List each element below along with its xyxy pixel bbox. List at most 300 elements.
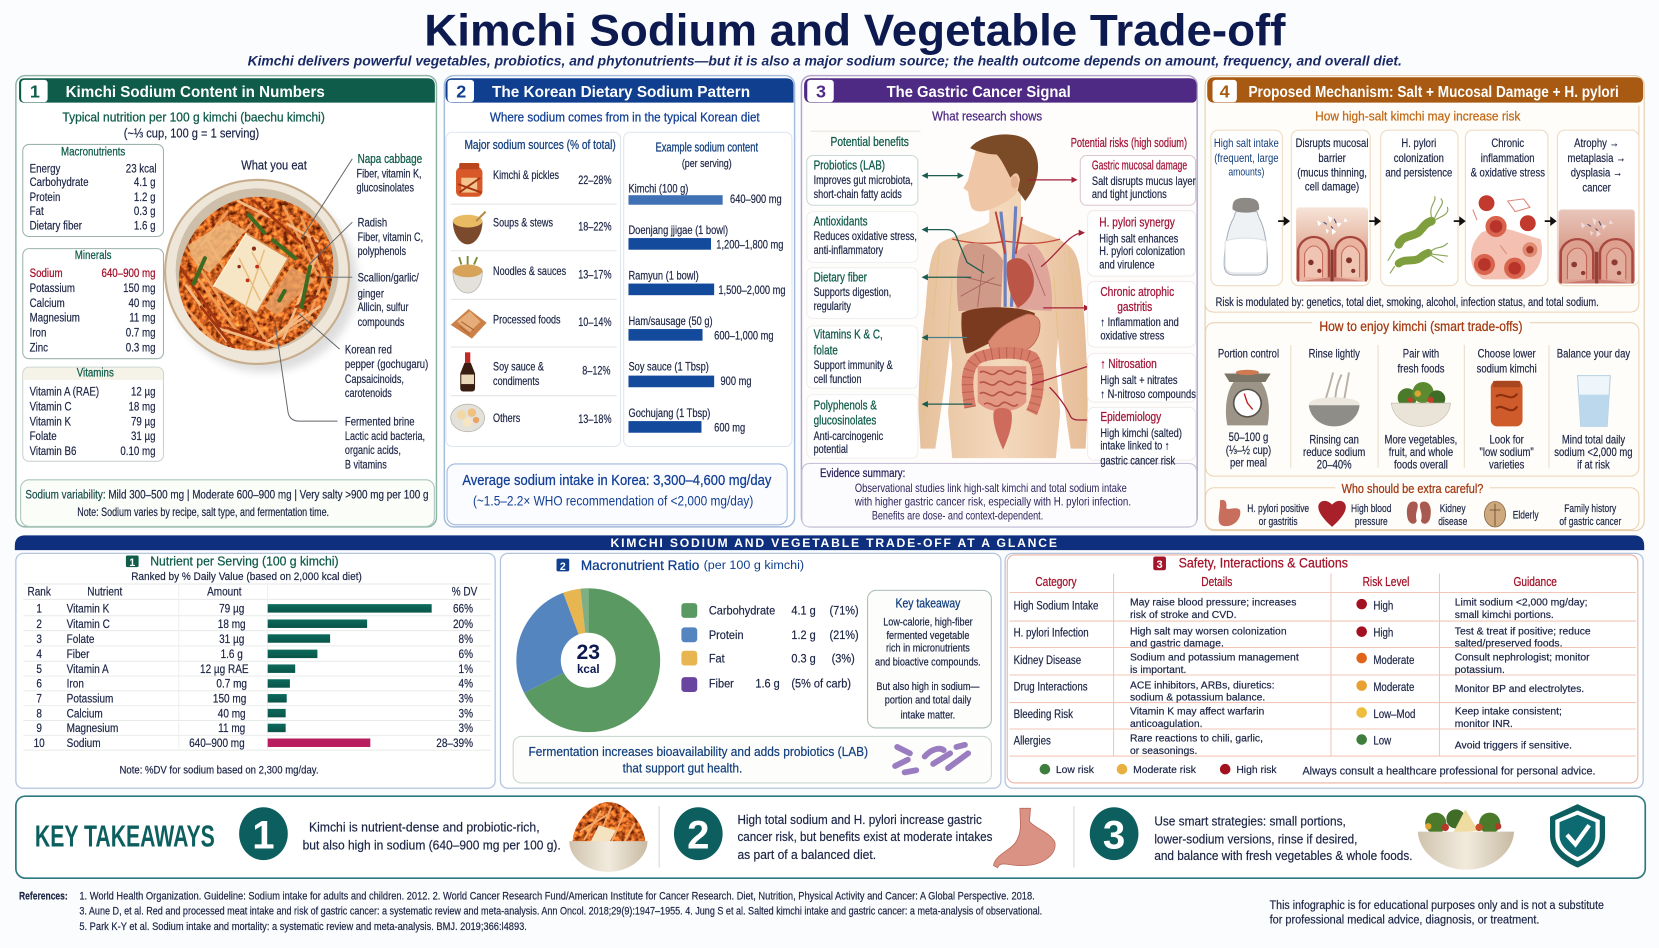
safety table: Sodium and potassium management [1130, 653, 1299, 664]
icon: stomach [1219, 500, 1240, 526]
sodium variability box: Note: Sodium varies by recipe, salt type, and fermentation time. [77, 506, 329, 519]
vitamins table: Vitamin B6 [30, 445, 76, 458]
references [19, 890, 1042, 933]
vitamins table: 12 µg [131, 386, 156, 399]
ingredient labels: Allicin, sulfur [358, 302, 409, 314]
icon: kimchi bowl [569, 801, 648, 872]
benefit: vitamins: Support immunity & [814, 360, 893, 373]
risk: H. pylori synergy [1088, 211, 1196, 276]
key takeaway box: intake matter. [901, 710, 955, 722]
icon: salad bowl [1418, 809, 1514, 870]
ingredient labels: Capsaicinoids, [345, 374, 404, 386]
ingredient labels: Napa cabbage [358, 152, 422, 166]
safety table: H. pylori Infection [1014, 626, 1089, 640]
tip: portion control: 50–100 g [1229, 431, 1268, 445]
ranked nutrient table: Nutrient [87, 586, 122, 599]
risk: epidemiology: gastric cancer risk [1100, 455, 1176, 468]
takeaway 2: High total sodium and H. pylori increase gastric [737, 812, 982, 827]
safety table: and gastric damage. [1130, 638, 1224, 649]
ranked nutrient table: Sodium [67, 737, 101, 750]
ranked nutrient table: Vitamin A [67, 663, 109, 676]
macronutrients table: Dietary fiber [30, 220, 82, 233]
serving heading [62, 111, 325, 141]
potential risks column: Potential risks (high sodium) [1071, 136, 1187, 150]
chart title [557, 558, 804, 573]
safety table: Monitor BP and electrolytes. [1455, 684, 1584, 695]
safety table: Rare reactions to chili, garlic, [1130, 734, 1263, 745]
ranked nutrient table: 79 µg [219, 603, 244, 616]
illustration: H. pylori bacteria [1388, 197, 1448, 273]
what you eat label: What you eat [241, 158, 307, 172]
disclaimer [1270, 898, 1604, 927]
icon: rinse bowl [1309, 372, 1360, 426]
ranked nutrient table: Magnesium [67, 723, 118, 735]
minerals table: Sodium [30, 267, 63, 281]
safety table: Category [1035, 576, 1077, 589]
macronutrients table: 1.6 g [134, 220, 156, 233]
icon: kimchi jar [456, 163, 482, 197]
ingredient labels [345, 152, 428, 472]
example sodium content bars: 600–1,000 mg [714, 330, 774, 343]
ingredient labels: glucosinolates [357, 183, 414, 195]
ranked nutrient table: 11 mg [218, 723, 245, 735]
panel 1 header: 1 [30, 81, 40, 101]
illustration: damaged mucosa [1296, 207, 1368, 281]
risk legend: Moderate risk [1133, 765, 1197, 776]
illustration: kimchi bowl [164, 179, 358, 372]
risk: nitrosation: ↑ N-nitroso compounds [1100, 388, 1196, 401]
ranked nutrient table: Folate [67, 633, 94, 646]
ranked nutrient table: 18 mg [218, 618, 246, 631]
safety title: 3 [1157, 559, 1163, 571]
step 5: atrophy to cancer: metaplasia → [1568, 152, 1626, 165]
donut legend: 1.6 g [755, 678, 780, 691]
major sodium sources list: 13–18% [578, 414, 612, 427]
vitamins table: Vitamin K [30, 415, 72, 429]
takeaway 3: 3 [1103, 813, 1125, 858]
benefit: dietary fiber: Dietary fiber [814, 271, 867, 285]
risk: nitrosation [1088, 353, 1196, 402]
major sodium sources list: Processed foods [493, 315, 561, 327]
vitamins table: Vitamin A (RAE) [30, 386, 99, 399]
risk group: family history [1559, 503, 1622, 528]
ingredient labels: B vitamins [345, 460, 387, 472]
major sodium sources list [446, 132, 621, 446]
major sodium sources list: Soups & stews [493, 217, 553, 230]
ranked nutrient table: 6% [459, 648, 473, 661]
icon: others bowl [451, 404, 485, 432]
risk: H. pylori synergy: and virulence [1099, 259, 1155, 272]
benefit: vitamins: cell function [814, 374, 862, 386]
benefit: probiotics [807, 156, 918, 205]
risk group: H. pylori [1247, 503, 1310, 528]
icon: shield check [1550, 804, 1605, 868]
risk: chronic atrophic gastritis: oxidative stress [1100, 330, 1164, 343]
key takeaway box: But also high in sodium— [876, 681, 980, 693]
safety table: Drug Interactions [1014, 680, 1088, 694]
panel: nutrient per serving [16, 553, 495, 788]
ingredient labels: organic acids, [345, 445, 401, 457]
risk: mucosal damage: Gastric mucosal damage [1092, 158, 1187, 172]
takeaway 1: but also high in sodium (640–900 mg per 100 g). [303, 838, 561, 853]
risk: chronic atrophic gastritis: gastritis [1117, 301, 1152, 314]
takeaway 2: cancer risk, but benefits exist at moderate intakes [737, 829, 993, 844]
ingredient labels: Radish [358, 216, 387, 230]
icon: processed foods [451, 309, 487, 339]
panel 3 header: The Gastric Cancer Signal [887, 84, 1071, 101]
evidence summary box: Benefits are dose- and context-dependent. [872, 509, 1043, 522]
minerals table: Calcium [30, 297, 65, 310]
benefit: vitamins: Vitamins K & C, [814, 329, 883, 342]
benefit: polyphenols: potential [814, 444, 848, 456]
step 5: atrophy to cancer: cancer [1582, 181, 1611, 195]
tip: pair with fresh foods: foods overall [1394, 459, 1448, 472]
minerals table: 640–900 mg [101, 267, 156, 281]
ingredient labels: polyphenols [358, 246, 406, 258]
risk group: kidney disease [1438, 503, 1468, 528]
tip: pair with fresh foods: More vegetables, [1385, 433, 1457, 447]
safety table: Test & treat if positive; reduce [1455, 626, 1591, 637]
donut chart: kcal [577, 663, 600, 676]
risk legend: Always consult a healthcare professional for personal advice. [1302, 765, 1596, 777]
ingredient labels: Fiber, vitamin K, [357, 169, 422, 181]
takeaway 3: lower-sodium versions, rinse if desired, [1154, 831, 1357, 846]
safety table: salted/preserved foods. [1455, 638, 1562, 649]
risk: mucosal damage: Salt disrupts mucus layer [1092, 175, 1196, 188]
ingredient labels: Lactic acid bacteria, [345, 431, 425, 443]
safety table: Vitamin K may affect warfarin [1130, 707, 1265, 718]
major sodium sources list: 13–17% [578, 269, 612, 282]
safety table: Kidney Disease [1014, 654, 1081, 667]
safety table: Allergies [1014, 734, 1051, 748]
benefit: polyphenols: Anti-carcinogenic [814, 431, 883, 443]
example sodium content bars [624, 132, 792, 446]
icon: kimchi jar [1491, 381, 1523, 426]
ranked nutrient table: 4% [459, 678, 473, 691]
ranked nutrient table: Calcium [67, 708, 103, 721]
risk group: high blood pressure [1351, 503, 1391, 528]
example sodium content bars: 1,500–2,000 mg [718, 284, 786, 297]
panel 1 header [19, 78, 435, 103]
example sodium content bars: (per serving) [682, 158, 732, 170]
icon: soy sauce bottle [460, 352, 475, 391]
safety table: Details [1201, 576, 1233, 589]
tip: pair with fresh foods [1385, 348, 1457, 472]
vitamins table: Vitamin C [30, 401, 72, 414]
vitamins table: 31 µg [131, 430, 156, 443]
risk group: H. pylori: H. pylori positive [1247, 503, 1310, 515]
donut legend [681, 603, 859, 692]
ingredient labels: Korean red [345, 343, 392, 357]
panel 4 subtitle: How high-salt kimchi may increase risk [1315, 110, 1521, 124]
chart title: (per 100 g kimchi) [704, 558, 804, 572]
icon: salt shaker [1224, 198, 1268, 275]
example sodium content bars: Ham/sausage (50 g) [628, 315, 713, 328]
smart trade-offs box [1206, 317, 1639, 476]
table title [126, 554, 362, 583]
serving heading: Typical nutrition per 100 g kimchi (baechu kimchi) [62, 111, 325, 125]
ranked nutrient table: Fiber [67, 648, 90, 661]
example sodium content bars: Doenjang jjigae (1 bowl) [628, 224, 728, 237]
icon: elderly person [1484, 502, 1506, 527]
macronutrients table [23, 144, 163, 236]
tip: portion control: (⅓–½ cup) [1226, 444, 1271, 457]
major sodium sources list: 8–12% [582, 366, 610, 378]
ranked nutrient table: 3% [459, 708, 473, 721]
risk group: high blood pressure: pressure [1355, 516, 1388, 528]
icon: kidneys [1407, 502, 1431, 524]
panel 2: Korean dietary sodium pattern [444, 76, 795, 527]
panel 1: kimchi sodium content in numbers [16, 76, 436, 527]
vitamins table: 18 mg [129, 401, 156, 414]
panel: macronutrient ratio [500, 553, 1001, 788]
step 2: disrupts mucosal barrier: (mucus thinning, [1297, 167, 1367, 180]
risk legend: Low risk [1056, 765, 1095, 776]
risk: epidemiology [1088, 407, 1196, 468]
key takeaways panel [16, 796, 1645, 878]
ranked nutrient table: 8 [36, 708, 42, 721]
tip: choose lower sodium: varieties [1489, 459, 1525, 472]
ranked nutrient table: 5 [36, 663, 42, 676]
references: 3. Aune D, et al. Red and processed meat intake and risk of gastric cancer: a systematic review and meta-analysis. Ann Oncol. 2018;29(9):1947–1955. 4. Jung S et al. Salted kimchi intake and gastric cancer: a meta-analysis of observational. [79, 906, 1042, 918]
icon: soup bowl [453, 212, 486, 244]
illustration: human anatomy [918, 134, 1088, 458]
sodium variability box: Sodium variability: Mild 300–500 mg | Moderate 600–900 mg | Very salty >900 mg per 100 g [25, 487, 429, 501]
tip: pair with fresh foods: fruit, and whole [1389, 446, 1453, 459]
ranked nutrient table: 7 [36, 693, 42, 706]
risk: chronic atrophic gastritis: ↑ Inflammation and [1100, 316, 1179, 329]
example sodium content bars: Kimchi (100 g) [628, 183, 688, 196]
ingredient labels: ginger [358, 287, 384, 301]
average sodium intake callout: Average sodium intake in Korea: 3,300–4,600 mg/day [462, 473, 772, 489]
tip: rinse lightly: reduce sodium [1303, 446, 1365, 459]
step 4: chronic inflammation: inflammation [1481, 152, 1535, 165]
ranked nutrient table [23, 584, 491, 750]
example sodium content bars: 640–900 mg [730, 193, 782, 206]
fermentation note [513, 736, 991, 783]
benefit: polyphenols: glucosinolates [814, 414, 877, 428]
disclaimer: This infographic is for educational purposes only and is not a substitute [1270, 898, 1604, 912]
macronutrients table: 23 kcal [126, 163, 157, 176]
panel 3: gastric cancer signal [801, 76, 1197, 527]
risk: nitrosation: High salt + nitrates [1100, 374, 1178, 387]
minerals table: Minerals [75, 249, 112, 263]
step 2: disrupts mucosal barrier [1291, 130, 1370, 286]
ranked nutrient table: 640–900 mg [189, 737, 245, 750]
benefit: probiotics: Probiotics (LAB) [814, 159, 885, 173]
ranked nutrient table: 1 [36, 603, 42, 616]
takeaway 2: as part of a balanced diet. [737, 847, 876, 862]
panel 4 header [1207, 77, 1643, 103]
ranked nutrient table: Amount [207, 586, 242, 599]
ingredient labels: pepper (gochugaru) [345, 358, 428, 372]
macronutrients table: 4.1 g [134, 176, 156, 190]
ranked nutrient table: Iron [67, 678, 84, 691]
minerals table [23, 249, 163, 359]
ranked nutrient table: 40 mg [218, 708, 246, 721]
donut legend: (71%) [830, 605, 859, 618]
icon: noodle bowl [453, 256, 482, 293]
donut legend: Carbohydrate [709, 605, 775, 618]
ranked nutrient table: 3% [459, 693, 473, 706]
ranked nutrient table: Rank [28, 586, 51, 599]
panel: safety, interactions and cautions [1005, 553, 1643, 788]
ranked nutrient table: 1% [459, 663, 473, 676]
major sodium sources list: 18–22% [578, 222, 612, 234]
title: Kimchi Sodium and Vegetable Trade-off [424, 6, 1286, 55]
ranked nutrient table: 6 [36, 678, 42, 691]
tip: pair with fresh foods: Pair with [1403, 348, 1439, 361]
ingredient labels: Scallion/garlic/ [358, 271, 420, 285]
average sodium intake callout: (~1.5–2.2× WHO recommendation of <2,000 mg/day) [473, 494, 753, 509]
safety table: risk of stroke and CVD. [1130, 610, 1236, 621]
ranked nutrient table: Vitamin C [67, 618, 110, 631]
benefit: dietary fiber: Supports digestion, [814, 287, 891, 300]
benefit: polyphenols: Polyphenols & [814, 399, 877, 413]
benefit: polyphenols [807, 395, 918, 458]
takeaway 3: Use smart strategies: small portions, [1154, 813, 1346, 828]
donut chart: 23 [576, 641, 600, 664]
minerals table: Zinc [30, 341, 48, 355]
safety table: Moderate [1373, 681, 1414, 694]
icon: water glass [1578, 376, 1610, 426]
step 5: atrophy to cancer: Atrophy → [1574, 137, 1619, 150]
key takeaway box: Low-calorie, high-fiber [883, 617, 973, 629]
benefit: dietary fiber: regularity [814, 301, 852, 313]
donut legend: 4.1 g [791, 605, 816, 618]
tip: rinse lightly [1303, 348, 1365, 472]
risk legend [1040, 764, 1596, 777]
tip: choose lower sodium: sodium kimchi [1477, 362, 1537, 376]
evidence summary box: with higher gastric cancer risk, especially with H. pylori infection. [854, 496, 1131, 509]
tip: balance your day: Mind total daily [1562, 433, 1626, 447]
major sodium sources list: Soy sauce & [493, 361, 544, 374]
ranked nutrient table: 20% [453, 618, 473, 631]
ranked nutrient table: 1.6 g [221, 648, 243, 661]
major sodium sources list: Kimchi & pickles [493, 170, 559, 182]
major sodium sources list: condiments [493, 376, 539, 388]
step 1: high salt intake [1211, 130, 1282, 286]
risk group: family history: Family history [1564, 503, 1616, 515]
ranked nutrient table: 4 [36, 648, 42, 661]
donut legend: 1.2 g [791, 630, 816, 642]
benefit: antioxidants: Antioxidants [814, 215, 868, 229]
risk: mucosal damage: and tight junctions [1092, 188, 1167, 201]
risk group: high blood pressure: High blood [1351, 503, 1391, 515]
benefit: probiotics: short-chain fatty acids [814, 189, 902, 201]
takeaway 2: 2 [687, 813, 709, 858]
minerals table: 40 mg [129, 297, 156, 310]
step arrows [1278, 218, 1555, 224]
tip: portion control: Portion control [1218, 348, 1279, 361]
tip: choose lower sodium: Look for [1490, 433, 1524, 447]
step 3: H. pylori colonization: H. pylori [1401, 137, 1436, 150]
key takeaway box: Key takeaway [896, 596, 960, 611]
benefit: antioxidants: anti-inflammatory [814, 245, 884, 257]
minerals table: Potassium [30, 282, 75, 295]
tip: balance your day [1554, 348, 1633, 472]
risk legend: High risk [1236, 765, 1277, 776]
sodium variability box [21, 480, 434, 526]
tip: rinse lightly: Rinsing can [1309, 433, 1359, 447]
benefit: antioxidants: Reduces oxidative stress, [814, 231, 917, 244]
donut legend: Fat [709, 653, 725, 665]
ranked nutrient table: 3 [36, 633, 42, 646]
takeaway 1: Kimchi is nutrient-dense and probiotic-rich, [309, 820, 540, 835]
safety table: Bleeding Risk [1014, 708, 1073, 721]
ranked nutrient table: 8% [459, 633, 473, 646]
macronutrients table: Protein [30, 191, 60, 204]
safety table [1009, 573, 1636, 757]
donut legend: (21%) [830, 630, 859, 642]
benefit and risk arrows [925, 176, 1092, 420]
risk group: elderly: Elderly [1513, 509, 1539, 522]
minerals table: Magnesium [30, 312, 80, 325]
tip: choose lower sodium: Choose lower [1478, 348, 1536, 361]
step 4: chronic inflammation: Chronic [1491, 137, 1525, 150]
safety table: small kimchi portions. [1455, 610, 1554, 621]
safety table: monitor INR. [1455, 719, 1513, 730]
risk group: kidney disease: Kidney [1440, 503, 1466, 515]
risk: chronic atrophic gastritis: Chronic atrophic [1100, 286, 1174, 300]
smart trade-offs box: How to enjoy kimchi (smart trade-offs) [1319, 319, 1523, 334]
tip: choose lower sodium [1477, 348, 1537, 472]
tip: choose lower sodium: "low sodium" [1480, 446, 1534, 459]
step 1: high salt intake: High salt intake [1214, 137, 1279, 150]
panel 4: proposed mechanism [1205, 76, 1644, 531]
ranked nutrient table: Potassium [67, 693, 113, 706]
subtitle: Kimchi delivers powerful vegetables, probiotics, and phytonutrients—but it is also a major sodium source; the health outcome depends on amount, frequency, and overall diet. [248, 54, 1402, 70]
donut legend: (5% of carb) [791, 678, 851, 691]
average sodium intake callout [447, 464, 787, 525]
step 2: disrupts mucosal barrier: barrier [1318, 152, 1346, 165]
ingredient labels: carotenoids [345, 388, 392, 400]
major sodium sources list: Noodles & sauces [493, 266, 566, 278]
step 4: chronic inflammation: & oxidative stress [1471, 167, 1545, 180]
takeaway 1 [239, 801, 648, 872]
benefit: vitamins [807, 326, 918, 388]
takeaway 2 [674, 807, 1055, 868]
key takeaway box: rich in micronutrients [886, 643, 970, 655]
safety table: Guidance [1513, 576, 1557, 589]
minerals table: Iron [30, 327, 46, 340]
takeaway 3 [1090, 804, 1605, 870]
vitamins table: Folate [30, 430, 57, 443]
donut legend: Fiber [709, 678, 734, 691]
risk: epidemiology: intake linked to ↑ [1100, 440, 1170, 453]
example sodium content bars: Ramyun (1 bowl) [628, 269, 699, 283]
benefit: antioxidants [807, 212, 918, 262]
key takeaway box: fermented vegetable [886, 630, 970, 642]
benefit: vitamins: folate [814, 344, 838, 358]
major sodium sources list: Others [493, 413, 520, 426]
panel 2 header: The Korean Dietary Sodium Pattern [492, 84, 750, 101]
safety table: Risk Level [1363, 576, 1409, 589]
step 1: high salt intake: amounts) [1228, 167, 1264, 179]
key takeaway box: and bioactive compounds. [875, 657, 981, 669]
major sodium sources list: 10–14% [578, 317, 612, 329]
example sodium content bars: Example sodium content [655, 140, 758, 154]
minerals table: 150 mg [123, 282, 156, 295]
divider [658, 806, 660, 868]
example sodium content bars: 600 mg [714, 422, 745, 435]
risk: H. pylori synergy: H. pylori colonization [1099, 245, 1185, 258]
fermentation note: that support gut health. [623, 760, 742, 775]
vitamins table: Vitamins [77, 367, 114, 380]
key takeaway box: portion and total daily [885, 695, 972, 707]
donut legend: (3%) [832, 653, 855, 665]
safety table: sodium & potassium balance. [1130, 692, 1265, 703]
